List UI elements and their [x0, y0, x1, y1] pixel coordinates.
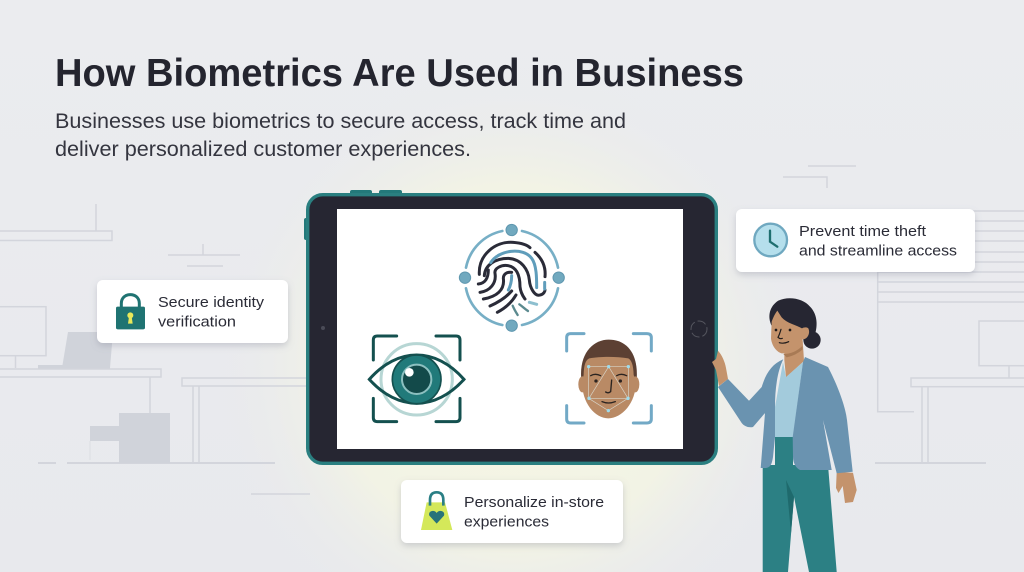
hand: right [836, 472, 857, 503]
hand: on tablet [712, 351, 728, 386]
icon: clock [754, 224, 787, 256]
head [769, 298, 821, 377]
label: experiences [464, 514, 549, 530]
office backdrop: left side [0, 204, 312, 494]
card: secure identity [97, 280, 288, 343]
subtitle [55, 110, 626, 161]
office backdrop: right side [783, 166, 1024, 463]
label [799, 223, 957, 260]
label: Secure identity [158, 294, 265, 311]
card: prevent time theft [736, 209, 975, 272]
person presenting [712, 298, 857, 572]
icon: eye scan [369, 336, 464, 422]
icon: face scan [567, 334, 651, 423]
icon: padlock [116, 295, 145, 329]
label [158, 294, 265, 330]
tablet [304, 190, 716, 463]
title: How Biometrics Are Used in Business [55, 52, 744, 95]
card: personalize in-store [401, 480, 623, 543]
shirt [775, 362, 803, 437]
jacket [718, 357, 853, 473]
trousers [763, 465, 837, 572]
subtitle: Businesses use biometrics to secure access, track time and [55, 110, 626, 133]
label: Personalize in-store [464, 494, 604, 511]
label: and streamline access [799, 242, 957, 260]
icon: fingerprint [459, 224, 564, 331]
label: Prevent time theft [799, 223, 927, 240]
icon: shopping bag [421, 492, 452, 530]
label [464, 494, 604, 530]
label: verification [158, 314, 236, 330]
subtitle: deliver personalized customer experiences. [55, 138, 471, 161]
